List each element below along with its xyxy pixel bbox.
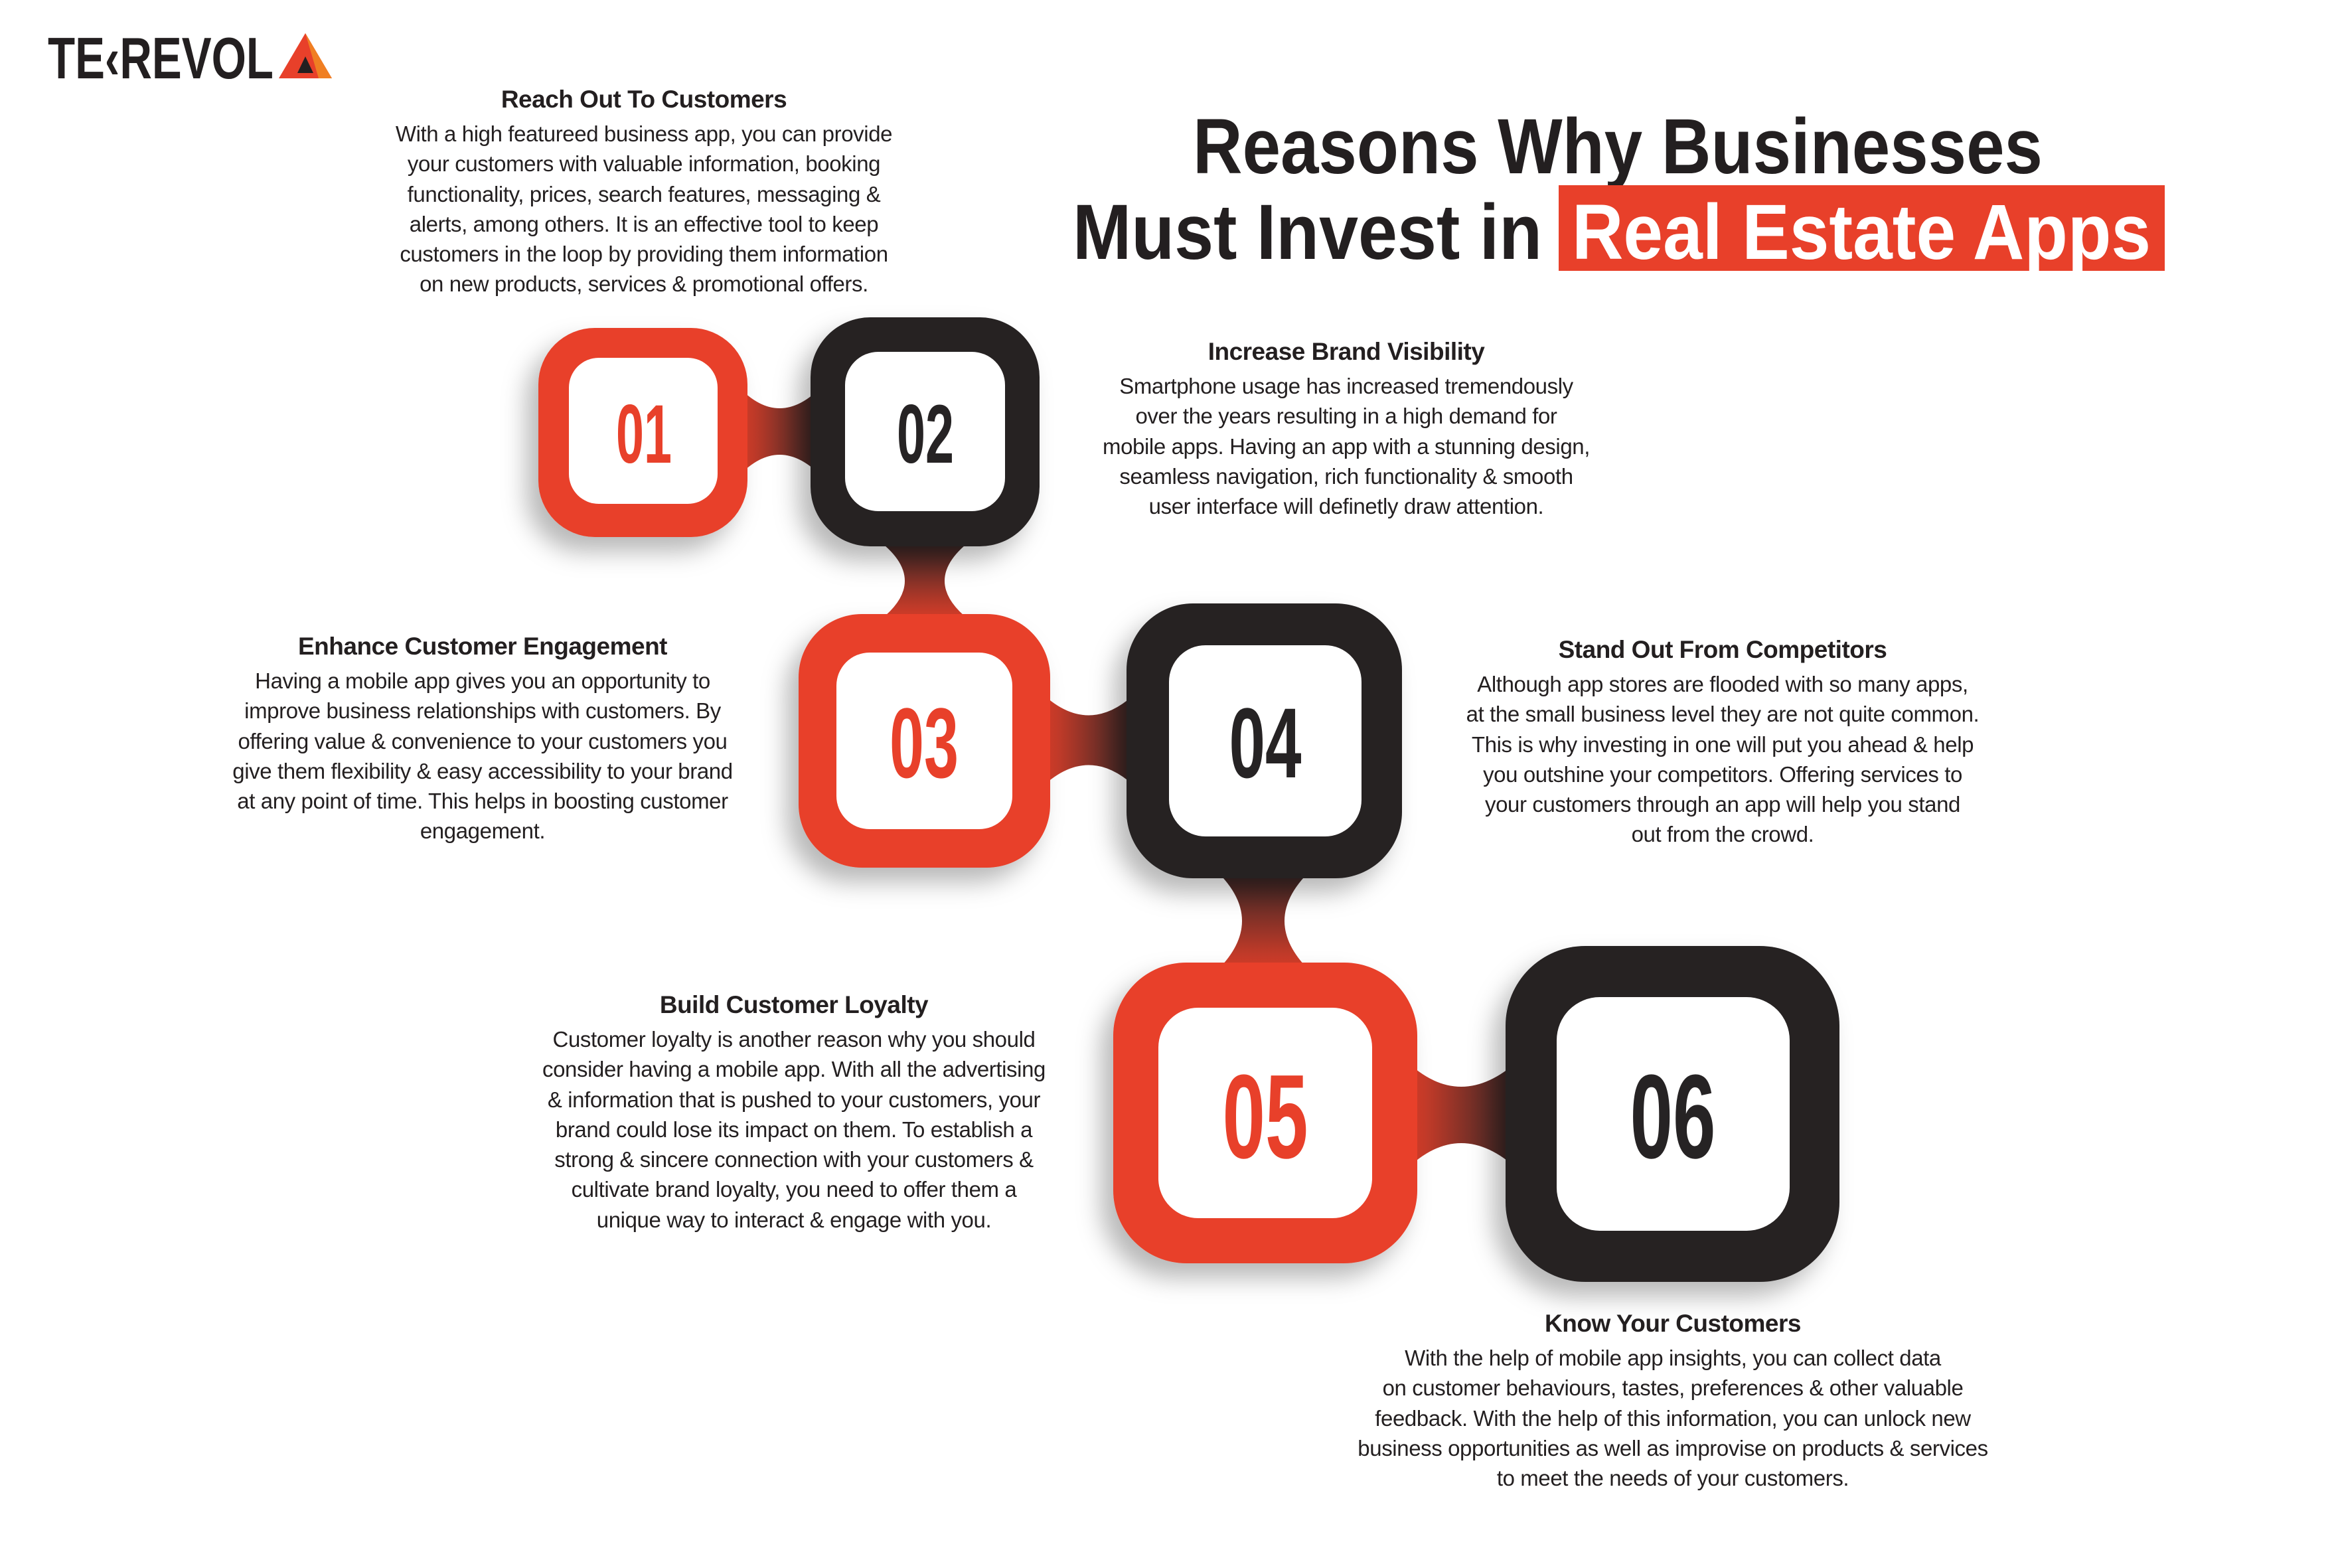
- box 04: 04: [1229, 687, 1301, 799]
- text: Know Your Customers: business opportunities as well as improvise on products & services: [1358, 1436, 1988, 1460]
- text: Increase Brand Visibility: seamless navigation, rich functionality & smooth: [1119, 464, 1573, 489]
- text: Reach Out To Customers: functionality, prices, search features, messaging &: [408, 182, 880, 206]
- title: Real Estate Apps: [1572, 189, 2151, 276]
- text: Stand Out From Competitors: you outshine your competitors. Offering services to: [1483, 762, 1962, 787]
- text: Build Customer Loyalty: cultivate brand loyalty, you need to offer them a: [572, 1177, 1016, 1202]
- text: Build Customer Loyalty: unique way to interact & engage with you.: [597, 1208, 991, 1232]
- box 01: 01: [616, 388, 672, 481]
- text: Build Customer Loyalty: consider having a mobile app. With all the advertising: [542, 1057, 1046, 1081]
- text: Stand Out From Competitors: Although app stores are flooded with so many apps,: [1477, 672, 1968, 696]
- connector 02-03: [875, 538, 974, 624]
- connector 05-06: [1404, 1059, 1520, 1172]
- text: Reach Out To Customers: With a high featureed business app, you can provide: [396, 121, 892, 146]
- text: Reach Out To Customers: on new products, services & promotional offers.: [420, 272, 868, 296]
- text: Build Customer Loyalty: [542, 991, 1046, 1232]
- box 06: [1506, 946, 1839, 1282]
- box 05: [1113, 963, 1417, 1263]
- text: Know Your Customers: Know Your Customers: [1545, 1310, 1801, 1337]
- text: Build Customer Loyalty: Build Customer Loyalty: [660, 991, 928, 1018]
- text: Know Your Customers: With the help of mobile app insights, you can collect data: [1405, 1346, 1941, 1370]
- box 03: 03: [890, 687, 959, 799]
- box 02: [811, 317, 1040, 546]
- text: Build Customer Loyalty: strong & sincere connection with your customers &: [554, 1147, 1034, 1172]
- box 06: 06: [1630, 1050, 1715, 1184]
- text: Stand Out From Competitors: This is why investing in one will put you ahead & help: [1472, 732, 1974, 757]
- text: Reach Out To Customers: [396, 86, 892, 296]
- title: [1073, 103, 2165, 276]
- text: Enhance Customer Engagement: give them flexibility & easy accessibility to your brand: [232, 759, 733, 783]
- text: Enhance Customer Engagement: Enhance Customer Engagement: [298, 633, 667, 660]
- box 02: 02: [897, 388, 954, 481]
- text: Reach Out To Customers: alerts, among others. It is an effective tool to keep: [410, 212, 878, 236]
- connector 01-02: [737, 385, 823, 478]
- title: Reasons Why Businesses: [1193, 103, 2043, 191]
- text: Increase Brand Visibility: over the years resulting in a high demand for: [1135, 404, 1557, 428]
- text: Enhance Customer Engagement: engagement.: [420, 819, 545, 843]
- text: Enhance Customer Engagement: improve business relationships with customers. By: [244, 698, 721, 723]
- box 01: [538, 328, 747, 537]
- text: Know Your Customers: on customer behaviours, tastes, preferences & other valuable: [1383, 1375, 1963, 1400]
- box 05: 05: [1223, 1050, 1308, 1184]
- text: Enhance Customer Engagement: at any point of time. This helps in boosting customer: [237, 789, 728, 813]
- text: Reach Out To Customers: Reach Out To Customers: [501, 86, 787, 113]
- text: Stand Out From Competitors: at the small business level they are not quite common.: [1466, 702, 1979, 726]
- text: Reach Out To Customers: customers in the loop by providing them information: [400, 242, 888, 266]
- text: Build Customer Loyalty: Customer loyalty is another reason why you should: [553, 1027, 1035, 1052]
- text: Increase Brand Visibility: mobile apps. Having an app with a stunning design,: [1103, 434, 1590, 459]
- logo: TE‹REVOL: [48, 25, 273, 91]
- text: Know Your Customers: feedback. With the help of this information, you can unlock new: [1375, 1406, 1971, 1431]
- connector 04-05: [1211, 866, 1315, 976]
- text: Build Customer Loyalty: & information that is pushed to your customers, your: [548, 1087, 1040, 1112]
- text: Stand Out From Competitors: Stand Out From Competitors: [1559, 636, 1887, 663]
- title: Must Invest in: [1073, 189, 1542, 276]
- text: Enhance Customer Engagement: offering value & convenience to your customers you: [238, 729, 728, 753]
- text: Build Customer Loyalty: brand could lose its impact on them. To establish a: [556, 1117, 1032, 1142]
- text: Stand Out From Competitors: out from the crowd.: [1632, 822, 1814, 846]
- text: Enhance Customer Engagement: [232, 633, 733, 843]
- text: Know Your Customers: [1358, 1310, 1988, 1490]
- text: Reach Out To Customers: your customers with valuable information, booking: [408, 151, 880, 176]
- text: Increase Brand Visibility: user interface will definetly draw attention.: [1149, 494, 1543, 518]
- text: Increase Brand Visibility: [1103, 338, 1590, 518]
- text: Enhance Customer Engagement: Having a mobile app gives you an opportunity to: [255, 668, 710, 693]
- text: Increase Brand Visibility: Increase Brand Visibility: [1208, 338, 1484, 365]
- text: Stand Out From Competitors: [1466, 636, 1979, 846]
- box 03: [799, 614, 1050, 868]
- text: Know Your Customers: to meet the needs of your customers.: [1497, 1466, 1849, 1490]
- text: Increase Brand Visibility: Smartphone usage has increased tremendously: [1119, 374, 1573, 398]
- connector 03-04: [1039, 690, 1138, 790]
- box 04: [1127, 603, 1402, 878]
- text: Stand Out From Competitors: your customers through an app will help you stand: [1485, 792, 1960, 817]
